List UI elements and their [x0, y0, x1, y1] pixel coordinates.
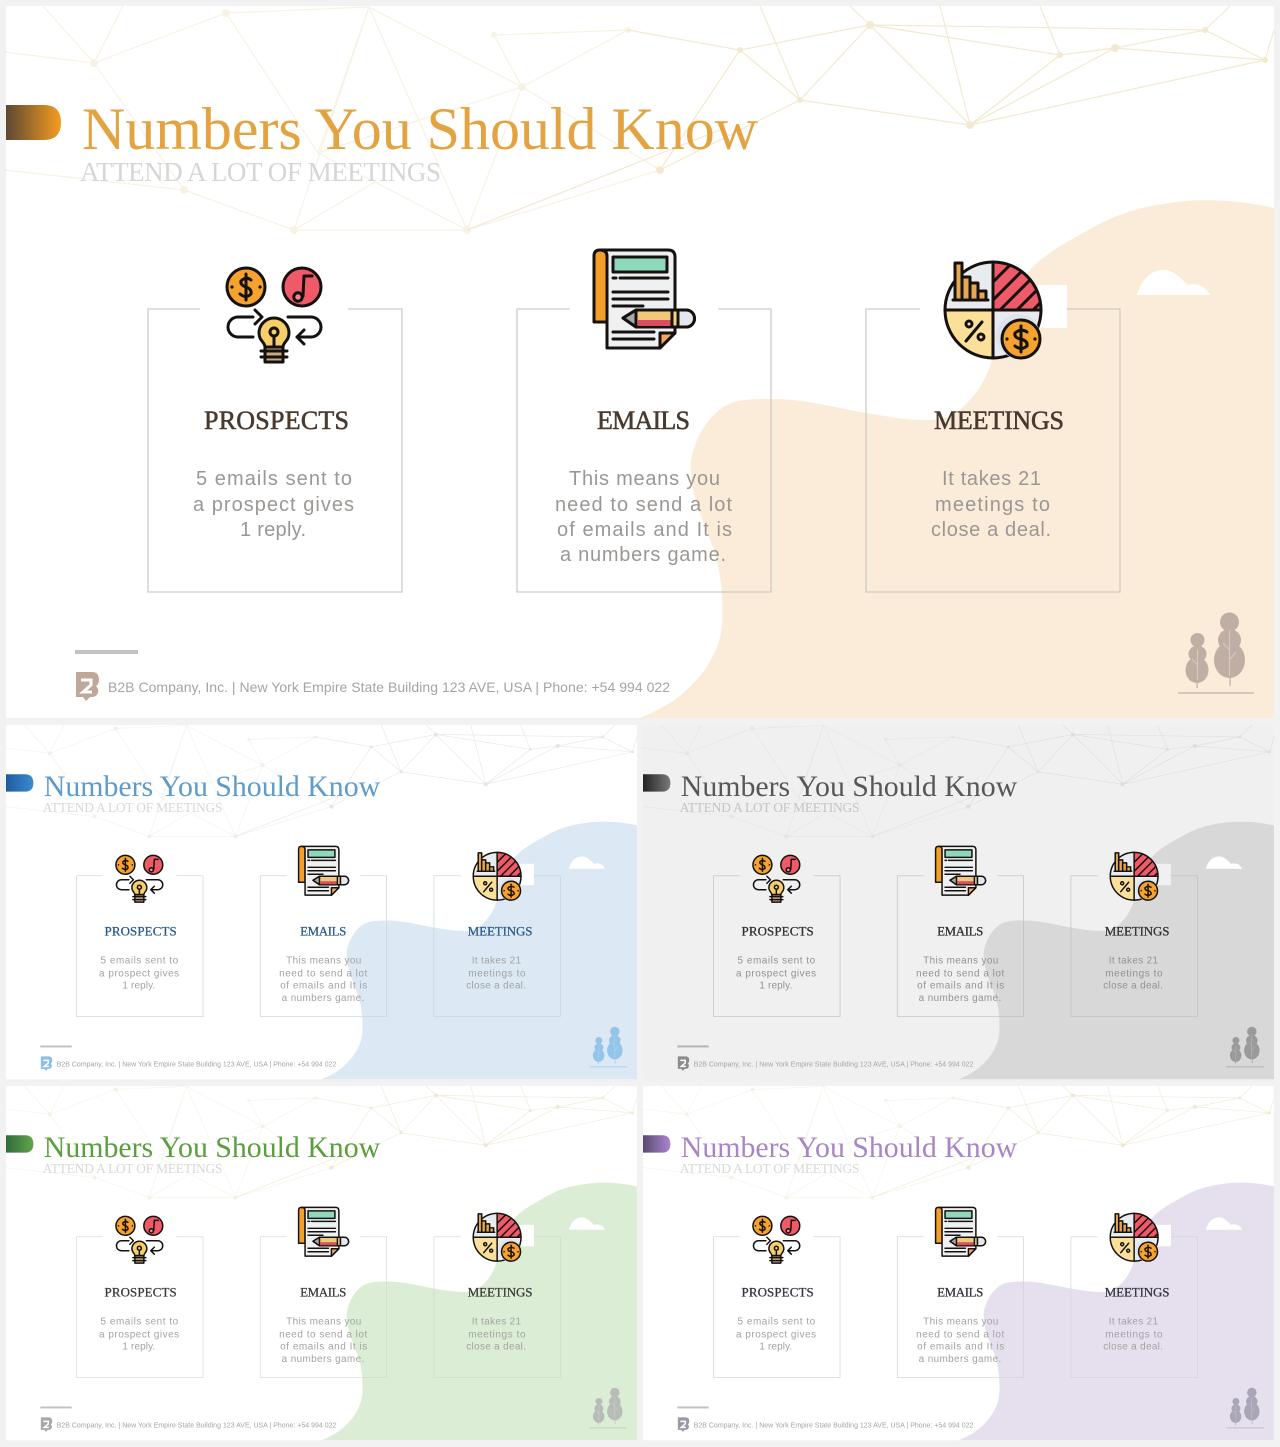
footer [677, 1406, 974, 1432]
panel: emails [517, 250, 771, 592]
text: emails: a numbers game. [282, 993, 364, 1004]
text: meetings: meetings to [1105, 1329, 1163, 1340]
marker tab [6, 105, 61, 140]
cloud [1137, 270, 1210, 295]
footer: B2B Company, Inc. | New York Empire State Building 123 AVE, USA | Phone: +54 994 022 [694, 1422, 974, 1429]
icon: trees [1226, 1388, 1264, 1428]
text: emails: This means you [569, 468, 720, 490]
text: emails: need to send a lot [916, 1329, 1004, 1340]
panel: meetings [434, 1212, 560, 1378]
panel: emails [260, 846, 387, 1017]
text: meetings: It takes 21 [1109, 955, 1158, 966]
heading: meetings: MEETINGS [1105, 923, 1169, 938]
text: meetings: It takes 21 [472, 955, 521, 966]
text: emails: of emails and It is [917, 981, 1004, 992]
heading: emails: EMAILS [937, 1284, 983, 1299]
text: emails: of emails and It is [917, 1342, 1004, 1353]
text: meetings: close a deal. [466, 981, 526, 992]
heading: emails: EMAILS [300, 1284, 346, 1299]
text: meetings: meetings to [468, 1329, 526, 1340]
text: emails [916, 955, 1004, 1004]
subtitle: ATTEND A LOT OF MEETINGS [680, 1161, 859, 1176]
icon: trees [589, 1388, 627, 1428]
text: emails [279, 1316, 367, 1365]
icon: emails [936, 846, 986, 895]
text: prospects: a prospect gives [736, 968, 816, 979]
panel: prospects [714, 855, 840, 1017]
title: Numbers You Should Know [82, 96, 759, 162]
text: meetings: It takes 21 [472, 1316, 521, 1327]
heading: prospects: PROSPECTS [742, 1284, 814, 1299]
heading: emails: EMAILS [937, 923, 983, 938]
text: emails: a numbers game. [282, 1354, 364, 1365]
text: prospects: 5 emails sent to [196, 468, 352, 490]
footer: B2B Company, Inc. | New York Empire State Building 123 AVE, USA | Phone: +54 994 022 [108, 679, 670, 695]
text: prospects: 5 emails sent to [738, 1316, 816, 1327]
slide: purple [642, 1086, 1274, 1440]
footer: B2B Company, Inc. | New York Empire State Building 123 AVE, USA | Phone: +54 994 022 [694, 1061, 974, 1068]
panel: emails [897, 1207, 1024, 1378]
icon: prospects [753, 1216, 800, 1263]
panel: prospects [714, 1216, 840, 1378]
footer [40, 1045, 337, 1071]
text: emails: need to send a lot [555, 494, 732, 516]
heading: prospects: PROSPECTS [105, 923, 177, 938]
text: meetings [466, 1316, 526, 1353]
text: prospects: 5 emails sent to [738, 955, 816, 966]
text: emails: of emails and It is [557, 519, 732, 541]
marker tab [6, 1135, 33, 1153]
text: prospects: a prospect gives [193, 494, 354, 516]
text: prospects: a prospect gives [99, 1329, 179, 1340]
icon: emails [594, 250, 694, 348]
heading: prospects: PROSPECTS [742, 923, 814, 938]
text: emails: This means you [923, 1316, 998, 1327]
title: Numbers You Should Know [44, 770, 381, 803]
subtitle: ATTEND A LOT OF MEETINGS [680, 800, 859, 815]
panel: emails [897, 846, 1024, 1017]
text: emails: a numbers game. [919, 993, 1001, 1004]
text: emails: of emails and It is [280, 981, 367, 992]
marker tab [6, 774, 33, 792]
text: emails: of emails and It is [280, 1342, 367, 1353]
heading: emails: EMAILS [300, 923, 346, 938]
icon: trees [589, 1027, 627, 1067]
text: prospects [736, 955, 816, 992]
heading: prospects: PROSPECTS [105, 1284, 177, 1299]
text: prospects [99, 955, 179, 992]
icon: meetings [1110, 851, 1162, 900]
title: Numbers You Should Know [681, 770, 1018, 803]
footer: B2B Company, Inc. | New York Empire State Building 123 AVE, USA | Phone: +54 994 022 [57, 1061, 337, 1068]
panel: meetings [866, 260, 1120, 592]
heading: emails: EMAILS [597, 406, 690, 435]
text: prospects [193, 468, 354, 541]
text: emails [279, 955, 367, 1004]
footer [40, 1406, 337, 1432]
subtitle: ATTEND A LOT OF MEETINGS [43, 800, 222, 815]
icon: emails [936, 1207, 986, 1256]
heading: meetings: MEETINGS [468, 1284, 532, 1299]
panel: prospects [77, 1216, 203, 1378]
slide: main orange [4, 6, 1274, 718]
cloud [1206, 1217, 1242, 1230]
icon: prospects [753, 855, 800, 902]
text: prospects: 1 reply. [122, 981, 155, 992]
text: prospects: 5 emails sent to [101, 955, 179, 966]
slide: green [5, 1086, 637, 1440]
text: emails [555, 468, 732, 566]
text: prospects: 1 reply. [240, 519, 306, 541]
text: meetings [1103, 955, 1163, 992]
title: Numbers You Should Know [44, 1131, 381, 1164]
text: emails: need to send a lot [916, 968, 1004, 979]
text: meetings: close a deal. [1103, 1342, 1163, 1353]
panel: prospects [77, 855, 203, 1017]
heading: meetings: MEETINGS [468, 923, 532, 938]
text: emails: a numbers game. [560, 544, 726, 566]
icon: prospects [116, 855, 163, 902]
panel: meetings [434, 851, 560, 1017]
subtitle: ATTEND A LOT OF MEETINGS [80, 157, 441, 187]
text: prospects: 1 reply. [122, 1342, 155, 1353]
text: meetings: meetings to [1105, 968, 1163, 979]
icon: prospects [227, 268, 321, 362]
icon: emails [299, 1207, 349, 1256]
text: meetings: It takes 21 [942, 468, 1041, 490]
icon: meetings [473, 851, 525, 900]
cloud [1206, 856, 1242, 869]
panel: emails [260, 1207, 387, 1378]
text: prospects: 1 reply. [759, 1342, 792, 1353]
text: prospects: 1 reply. [759, 981, 792, 992]
icon: meetings [473, 1212, 525, 1261]
footer: B2B Company, Inc. | New York Empire State Building 123 AVE, USA | Phone: +54 994 022 [57, 1422, 337, 1429]
text: emails: need to send a lot [279, 968, 367, 979]
icon: emails [299, 846, 349, 895]
subtitle: ATTEND A LOT OF MEETINGS [43, 1161, 222, 1176]
text: meetings: close a deal. [1103, 981, 1163, 992]
text: prospects: a prospect gives [99, 968, 179, 979]
text: meetings [466, 955, 526, 992]
panel: prospects [148, 268, 402, 592]
slide: blue [5, 725, 637, 1079]
cloud [569, 1217, 605, 1230]
text: meetings [931, 468, 1051, 541]
slide: gray [642, 725, 1274, 1079]
text: emails: This means you [923, 955, 998, 966]
heading: prospects: PROSPECTS [204, 406, 349, 435]
text: emails: need to send a lot [279, 1329, 367, 1340]
panel: meetings [1071, 851, 1197, 1017]
text: meetings: close a deal. [466, 1342, 526, 1353]
panel: meetings [1071, 1212, 1197, 1378]
footer [75, 650, 670, 701]
text: emails [916, 1316, 1004, 1365]
marker tab [643, 1135, 670, 1153]
text: meetings [1103, 1316, 1163, 1353]
text: meetings: meetings to [468, 968, 526, 979]
heading: meetings: MEETINGS [934, 406, 1064, 435]
text: emails: This means you [286, 1316, 361, 1327]
text: meetings: close a deal. [931, 519, 1051, 541]
icon: trees [1178, 612, 1254, 694]
text: prospects [99, 1316, 179, 1353]
title: Numbers You Should Know [681, 1131, 1018, 1164]
icon: prospects [116, 1216, 163, 1263]
text: prospects [736, 1316, 816, 1353]
heading: meetings: MEETINGS [1105, 1284, 1169, 1299]
icon: meetings [1110, 1212, 1162, 1261]
cloud [569, 856, 605, 869]
text: emails: This means you [286, 955, 361, 966]
icon: meetings [945, 260, 1050, 358]
footer [677, 1045, 974, 1071]
text: prospects: 5 emails sent to [101, 1316, 179, 1327]
text: meetings: meetings to [935, 494, 1050, 516]
text: prospects: a prospect gives [736, 1329, 816, 1340]
text: meetings: It takes 21 [1109, 1316, 1158, 1327]
marker tab [643, 774, 670, 792]
icon: trees [1226, 1027, 1264, 1067]
text: emails: a numbers game. [919, 1354, 1001, 1365]
